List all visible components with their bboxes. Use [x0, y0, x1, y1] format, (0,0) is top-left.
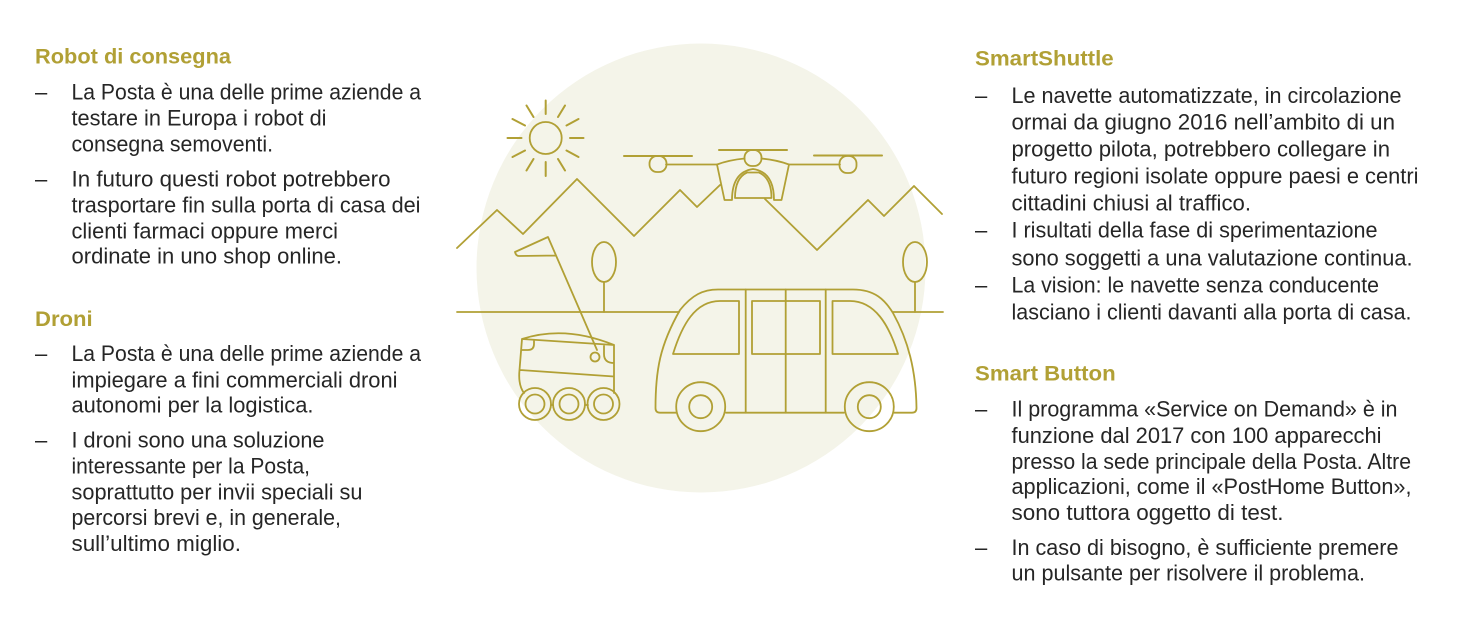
text block: button bullet 1: applicazioni, come il «PostHome Button»,	[1012, 474, 1412, 499]
panel: Robot di consegna	[35, 45, 422, 269]
heading: Smart Button: Smart Button	[975, 362, 1116, 386]
text block: droni bullet 2: interessante per la Posta,	[72, 453, 310, 478]
icon: sun	[508, 100, 584, 176]
text block: shuttle bullet 1	[975, 83, 1418, 216]
text block: droni bullet 1	[35, 341, 422, 418]
text block: droni bullet 2: –	[35, 428, 48, 453]
text block: button bullet 2: un pulsante per risolvere il problema.	[1012, 561, 1365, 586]
text block: droni bullet 2: percorsi brevi e, in generale,	[72, 505, 341, 530]
text block: shuttle bullet 2: –	[975, 218, 988, 243]
text block: button bullet 1: sono tuttora oggetto di test.	[1012, 500, 1284, 525]
text block: shuttle bullet 1: –	[975, 83, 988, 108]
text block: shuttle bullet 1: progetto pilota, potrebbero collegare in	[1012, 137, 1390, 162]
text block: robot bullet 1: testare in Europa i robot di	[72, 105, 326, 130]
icon: automated shuttle	[656, 290, 916, 431]
text block: button bullet 1: funzione dal 2017 con 100 apparecchi	[1012, 423, 1382, 448]
text block: robot bullet 2: trasportare fin sulla porta di casa dei	[72, 193, 420, 218]
illustration	[457, 100, 943, 431]
text block: robot bullet 1: –	[35, 79, 48, 104]
text block: shuttle bullet 1: Le navette automatizzate, in circolazione	[1012, 83, 1402, 108]
text block: button bullet 2: –	[975, 535, 988, 560]
text block: robot bullet 1	[35, 79, 422, 156]
background circle	[476, 44, 926, 492]
icon: right tree	[903, 242, 927, 312]
text block: shuttle bullet 2: I risultati della fase di sperimentazione	[1012, 218, 1378, 243]
text block: shuttle bullet 3: La vision: le navette senza conducente	[1012, 273, 1379, 298]
text block: droni bullet 1: impiegare a fini commerciali droni	[72, 367, 398, 392]
text block: droni bullet 1: autonomi per la logistica.	[72, 393, 314, 418]
panel: Smart Button	[975, 362, 1412, 586]
text block: robot bullet 1: La Posta è una delle prime aziende a	[72, 79, 422, 104]
mountains	[457, 179, 942, 250]
text block: button bullet 1: presso la sede principale della Posta. Altre	[1012, 449, 1411, 474]
icon: drone	[624, 150, 882, 200]
icon: left tree	[592, 242, 616, 312]
text block: shuttle bullet 2: sono soggetti a una valutazione continua.	[1012, 246, 1412, 271]
text block: droni bullet 2	[35, 428, 362, 556]
text block: button bullet 1: –	[975, 397, 988, 422]
heading: SmartShuttle: SmartShuttle	[975, 46, 1114, 70]
text block: shuttle bullet 3	[975, 273, 1412, 324]
text block: shuttle bullet 1: futuro regioni isolate oppure paesi e centri	[1012, 164, 1418, 189]
text block: droni bullet 2: I droni sono una soluzione	[72, 428, 324, 453]
text block: robot bullet 2: clienti farmaci oppure merci	[72, 218, 338, 243]
text block: droni bullet 1: La Posta è una delle prime aziende a	[72, 341, 422, 366]
text block: button bullet 2	[975, 535, 1398, 586]
panel: SmartShuttle	[975, 46, 1418, 324]
text block: droni bullet 2: sull’ultimo miglio.	[72, 531, 241, 556]
text block: robot bullet 2: –	[35, 167, 48, 192]
icon: delivery robot	[519, 333, 620, 420]
text block: robot bullet 1: consegna semoventi.	[72, 131, 273, 156]
text block: shuttle bullet 1: ormai da giugno 2016 nell’ambito di un	[1012, 110, 1395, 135]
text block: button bullet 2: In caso di bisogno, è sufficiente premere	[1012, 535, 1398, 560]
text block: shuttle bullet 2	[975, 218, 1412, 271]
panel: Droni	[35, 307, 422, 556]
text block: button bullet 1	[975, 397, 1412, 525]
heading: Droni: Droni	[35, 307, 93, 331]
ground line	[457, 311, 943, 313]
text block: button bullet 1: Il programma «Service on Demand» è in	[1012, 397, 1398, 422]
icon: flag and pole	[515, 237, 600, 362]
text block: shuttle bullet 3: –	[975, 273, 988, 298]
text block: droni bullet 1: –	[35, 341, 48, 366]
text block: robot bullet 2: In futuro questi robot potrebbero	[72, 167, 390, 192]
heading: Robot di consegna: Robot di consegna	[35, 45, 232, 69]
text block: shuttle bullet 1: cittadini chiusi al traffico.	[1012, 191, 1251, 216]
text block: shuttle bullet 3: lasciano i clienti davanti alla porta di casa.	[1012, 299, 1412, 324]
text block: robot bullet 2: ordinate in uno shop online.	[72, 244, 342, 269]
text block: droni bullet 2: soprattutto per invii speciali su	[72, 479, 362, 504]
text block: robot bullet 2	[35, 167, 420, 269]
